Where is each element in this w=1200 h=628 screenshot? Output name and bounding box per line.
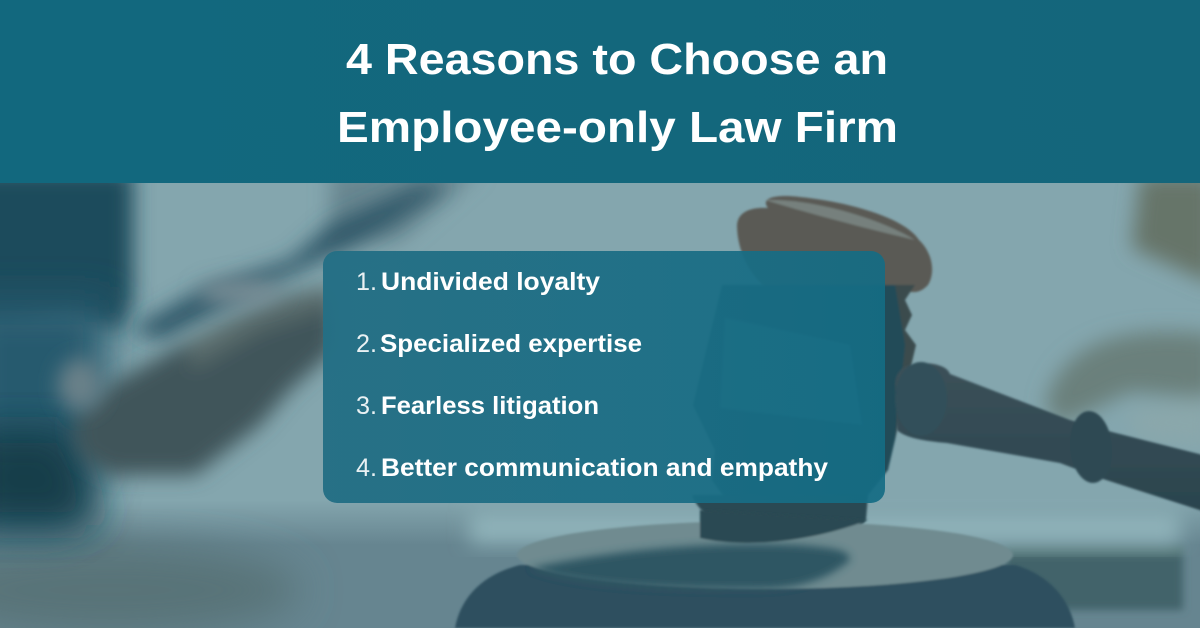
gavel head (692, 196, 932, 544)
reason 4: 4. (356, 454, 377, 482)
blurred hand (72, 285, 335, 475)
reason 3: 3. (356, 392, 377, 420)
header band (0, 0, 1200, 183)
title (337, 35, 898, 152)
sound block (455, 510, 1075, 628)
title: 4 Reasons to Choose an (346, 35, 888, 84)
lower-left darker table (0, 545, 300, 628)
lower table tone (0, 500, 1200, 628)
reason 3: Fearless litigation (381, 392, 599, 420)
blue-dark sleeve on the left (0, 170, 133, 330)
head top disc (737, 196, 932, 292)
head neck (860, 285, 916, 470)
right background shapes (1045, 175, 1200, 445)
blurred band above the hand (130, 185, 450, 340)
panel: four reasons list (323, 251, 885, 503)
reason 2: 2. (356, 330, 377, 358)
reason 2: Specialized expertise (380, 330, 642, 358)
reason 1: 1. (356, 268, 377, 296)
gavel handle (895, 362, 1200, 515)
reason 4: Better communication and empathy (381, 454, 828, 482)
head body (693, 285, 905, 505)
title: Employee-only Law Firm (337, 103, 898, 152)
reason 1: Undivided loyalty (381, 268, 600, 296)
upper background tone (330, 170, 480, 250)
